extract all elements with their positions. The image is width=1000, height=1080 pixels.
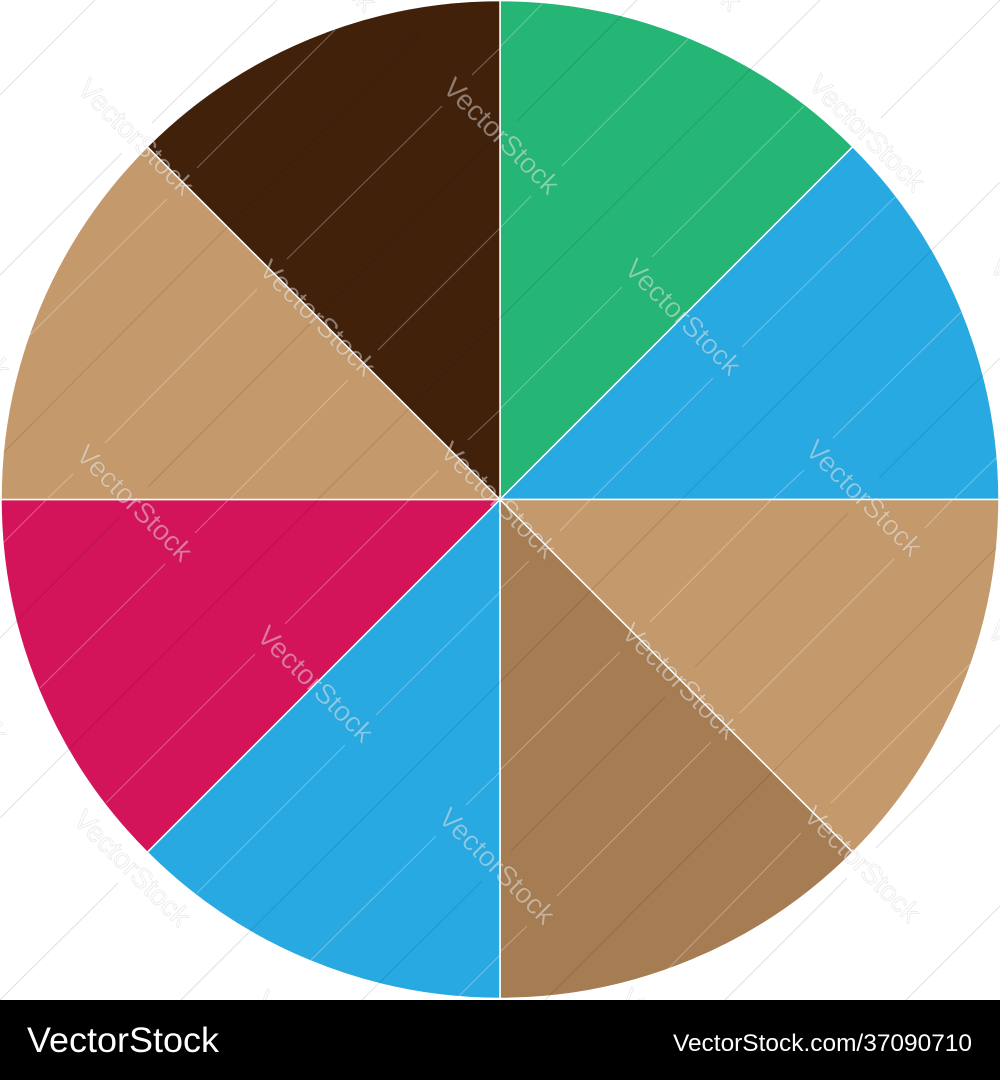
wedge: tan right [500, 500, 999, 852]
watermark: repeated VectorStock text: VectorStock [68, 804, 197, 933]
wedge: crimson [1, 500, 500, 852]
watermark: repeated VectorStock text: VectorStock [798, 800, 927, 929]
watermark: repeated VectorStock text: VectorStock [434, 436, 564, 565]
watermark: repeated VectorStock text: VectorStock [433, 802, 562, 931]
footer bar [0, 1000, 1000, 1080]
watermark: repeated VectorStock text: VectorStock [437, 72, 567, 201]
wedge: brown [500, 500, 853, 998]
watermark: repeated VectorStock text: VectorStock [616, 617, 745, 746]
footer image id: VectorStock.com/37090710 [673, 1030, 972, 1057]
watermark: repeated VectorStock text: VectorStock [800, 434, 929, 563]
wedge: tan left [1, 147, 500, 499]
footer logo text: VectorStock [27, 1021, 220, 1060]
watermark: repeated VectorStock text: VectorStock [803, 69, 932, 198]
watermark: repeated VectorStock text: VectorStock [251, 620, 381, 749]
watermark: repeated VectorStock text: VectorStock [72, 73, 201, 202]
watermark: repeated VectorStock text: VectorStock [253, 254, 383, 383]
wedge: blue upper right [500, 147, 999, 499]
wedge: dark brown [147, 0, 500, 500]
wedge: blue lower left [147, 500, 500, 998]
watermark: repeated VectorStock text: VectorStock [70, 439, 200, 568]
wedge: green [500, 0, 853, 500]
watermark: repeated VectorStock text: VectorStock [619, 253, 748, 382]
